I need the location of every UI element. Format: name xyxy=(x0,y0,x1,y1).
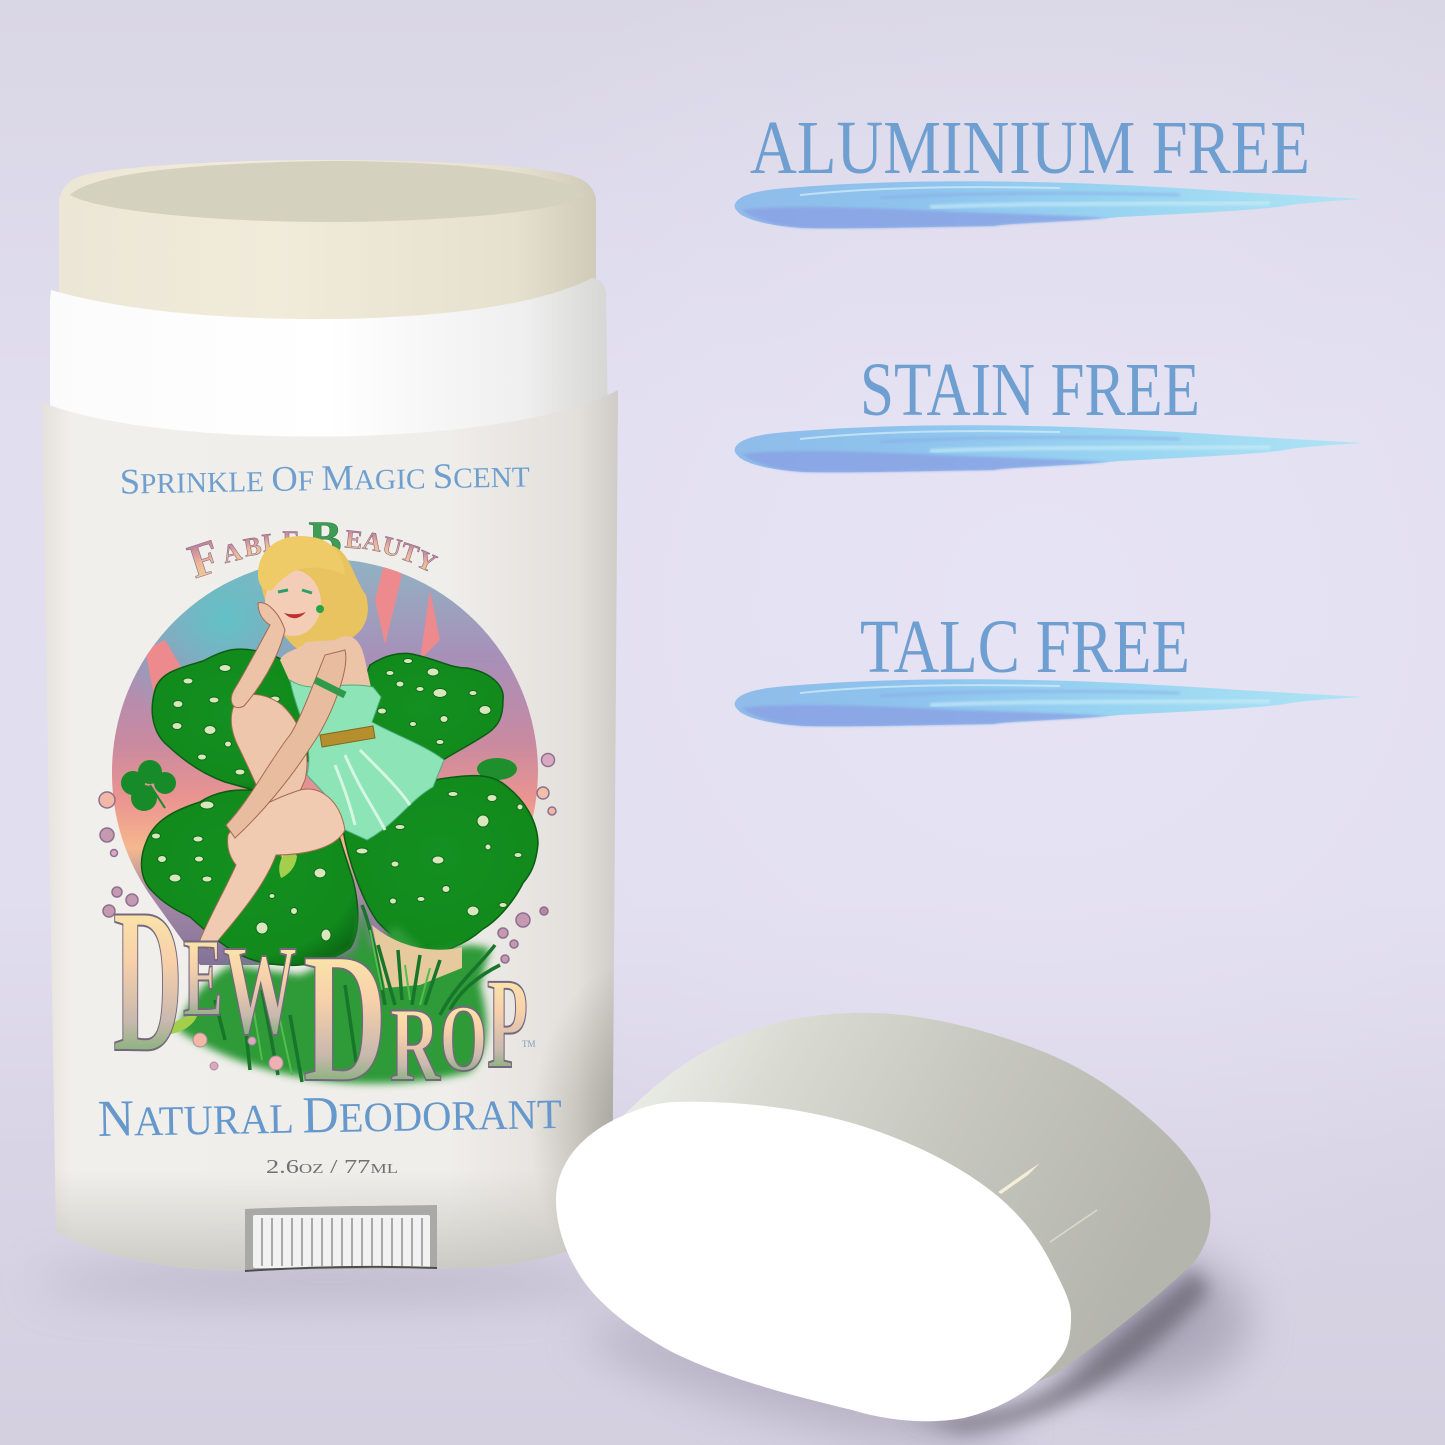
clover leaf upper left xyxy=(152,649,310,791)
cap xyxy=(556,1013,1210,1421)
dress xyxy=(290,680,444,840)
product name: P xyxy=(487,952,528,1096)
brand name arc: F xyxy=(182,530,226,589)
claim: aluminium free xyxy=(735,106,1363,228)
balm dome xyxy=(59,160,596,330)
brush stroke xyxy=(735,181,1363,228)
arm xyxy=(226,650,346,838)
heading: STAIN FREE xyxy=(860,348,1200,432)
brand name arc: B xyxy=(241,531,264,562)
container body xyxy=(42,390,618,1270)
lower bubbles xyxy=(193,1033,283,1070)
deodorant stick xyxy=(42,160,618,1272)
heading: TALC FREE xyxy=(860,605,1190,689)
brand name arc: L xyxy=(261,527,281,558)
size text: 2.6oz / 77ml xyxy=(266,1156,398,1178)
product name: D xyxy=(303,915,387,1121)
natural deodorant text: NATURAL DEODORANT xyxy=(97,1083,562,1148)
product name xyxy=(113,866,528,1121)
propping arm xyxy=(231,603,285,708)
front hair xyxy=(258,536,345,590)
cap side xyxy=(600,1013,1210,1400)
brand name arc: T xyxy=(397,536,422,569)
scent text: SPRINKLE OF MAGIC SCENT xyxy=(119,454,530,502)
small clover right xyxy=(477,758,517,780)
extended leg xyxy=(198,789,345,950)
brand name arc xyxy=(182,510,441,589)
fairy figure xyxy=(198,536,444,950)
product name: E xyxy=(183,916,223,1040)
product name: D xyxy=(113,866,183,1095)
cap open face xyxy=(556,1102,1071,1421)
claim: stain free xyxy=(735,348,1363,472)
raised leg xyxy=(231,695,307,862)
dial xyxy=(245,1205,437,1271)
brand name arc: U xyxy=(379,530,405,563)
dew drops xyxy=(152,658,523,941)
brand name arc: E xyxy=(282,526,300,555)
white sleeve xyxy=(50,278,608,460)
back hair xyxy=(260,537,368,654)
armband xyxy=(315,680,345,695)
brand name arc: A xyxy=(361,526,384,558)
product name: R xyxy=(390,986,441,1103)
brand name arc: B xyxy=(308,510,342,566)
brush stroke xyxy=(735,425,1363,472)
product name: W xyxy=(223,919,297,1061)
product name: O xyxy=(440,985,487,1091)
dress folds xyxy=(335,750,410,830)
shoe xyxy=(279,848,297,878)
eyes xyxy=(278,590,312,593)
smile xyxy=(284,612,306,618)
belt xyxy=(320,726,375,747)
earring xyxy=(316,605,324,613)
face xyxy=(265,570,321,636)
floor shadows xyxy=(35,1250,1250,1445)
shoe front xyxy=(160,1013,198,1036)
heading: ALUMINIUM FREE xyxy=(750,106,1310,190)
illustration: clover fairy xyxy=(99,500,556,1121)
clover leaf lower right xyxy=(343,776,538,953)
grass xyxy=(178,905,500,1084)
clover leaf upper right xyxy=(340,653,503,770)
claim: talc free xyxy=(735,605,1363,726)
brush stroke xyxy=(735,679,1363,726)
sky circle xyxy=(112,560,538,965)
brand name arc: E xyxy=(344,524,364,555)
torso xyxy=(280,636,372,695)
cap highlights xyxy=(998,1163,1040,1194)
clover leaf lower left xyxy=(141,790,358,965)
brand name arc: Y xyxy=(412,544,441,578)
tm: TM xyxy=(522,1039,536,1049)
small clover left xyxy=(121,760,176,811)
brand name arc: A xyxy=(219,536,245,569)
bubbles xyxy=(99,754,556,963)
